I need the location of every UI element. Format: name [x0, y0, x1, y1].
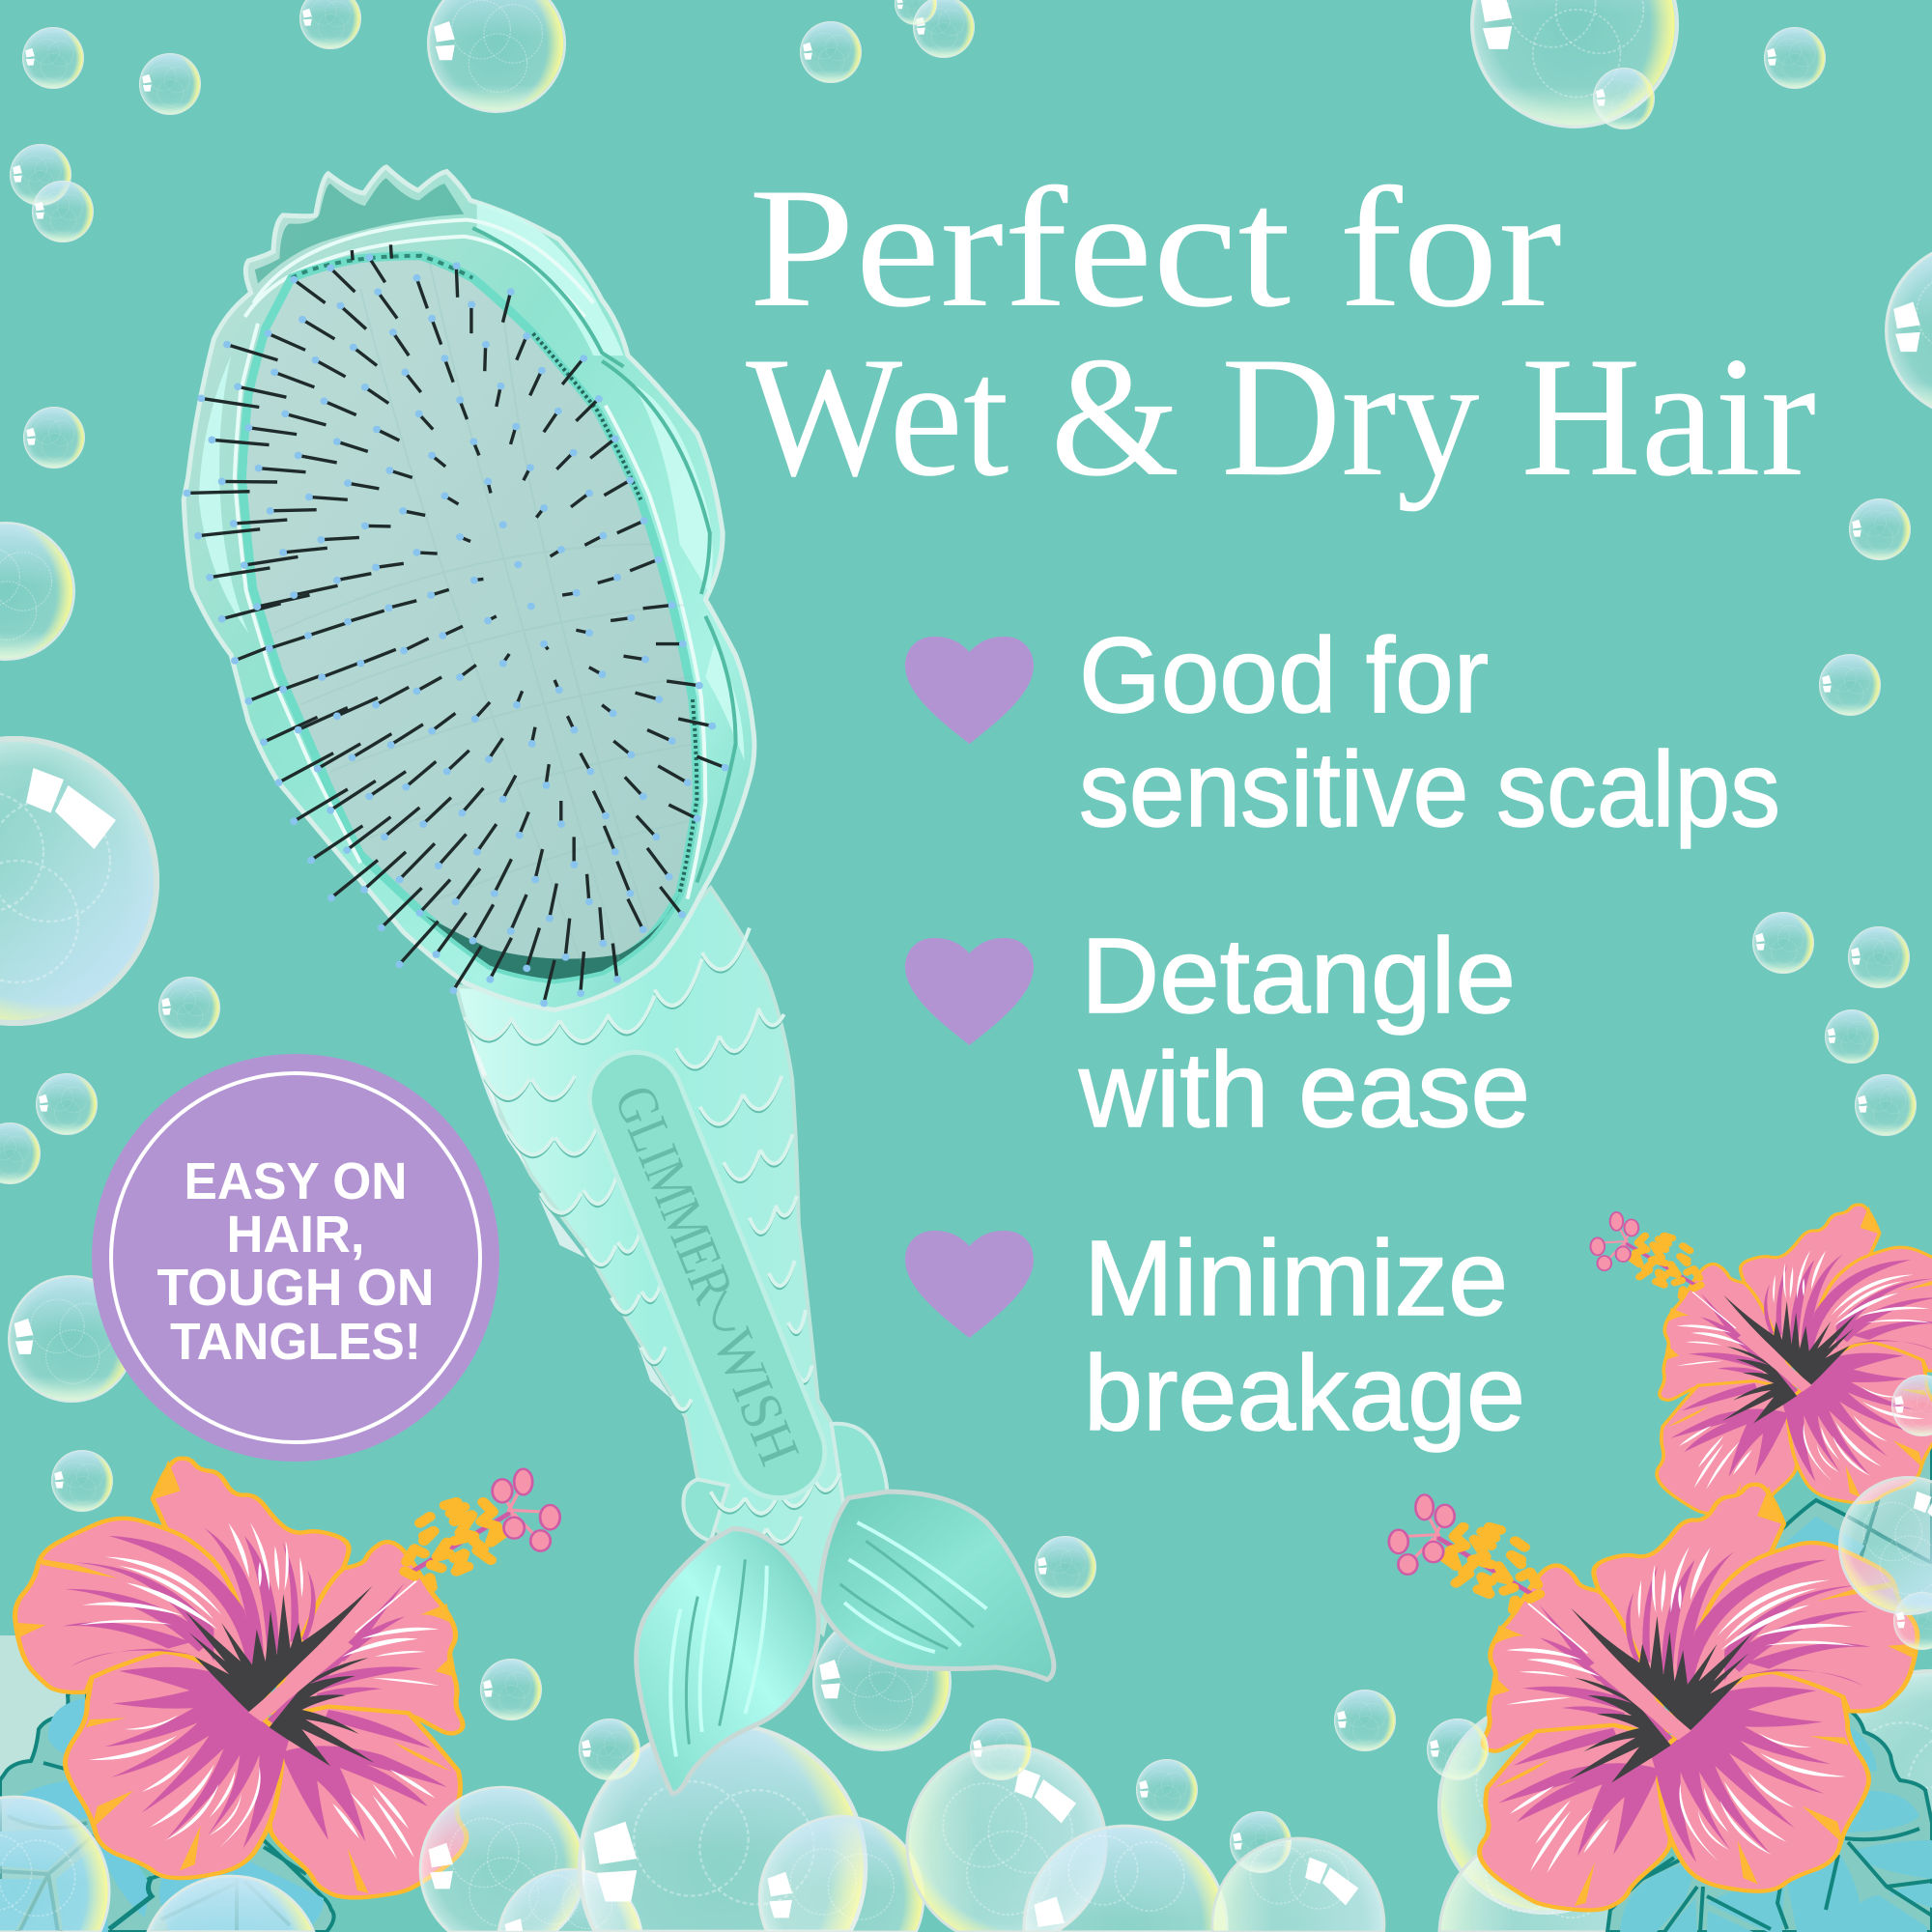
- hibiscus flower: right bottom: [1389, 1485, 1918, 1910]
- brush head: [184, 167, 754, 1009]
- benefit text: breakage: [1084, 1334, 1525, 1453]
- title: Wet & Dry Hair: [746, 321, 1816, 512]
- bristle pad: [242, 256, 696, 980]
- brand text: WISH: [700, 1321, 812, 1473]
- icon: heart: [905, 1231, 1034, 1338]
- badge: [92, 1054, 499, 1462]
- bristles: [186, 244, 725, 1004]
- pale panel behind left flower: [0, 1635, 92, 1800]
- title: Perfect for: [749, 152, 1562, 343]
- head frame with crown: [184, 167, 754, 1009]
- benefit: breakage: [905, 1219, 1525, 1453]
- brush: [184, 167, 1054, 1794]
- hibiscus flower: right top: [1590, 1205, 1932, 1517]
- benefit text: Detangle: [1081, 917, 1516, 1036]
- benefit text: Good for: [1079, 616, 1489, 735]
- bubble pile: bottom: [0, 1719, 1489, 1932]
- crown shading: [255, 178, 464, 284]
- leaves: right: [1607, 1449, 1932, 1932]
- leaves: left: [0, 1690, 334, 1932]
- brand plate: [576, 1038, 838, 1512]
- bubbles behind right flowers and leaves: [1437, 1671, 1932, 1932]
- tail fin: left lobe: [637, 1528, 818, 1794]
- badge text: EASY ON: [184, 1152, 408, 1210]
- icon: heart: [905, 637, 1034, 744]
- benefit text: with ease: [1078, 1031, 1530, 1150]
- icon: heart: [905, 938, 1034, 1045]
- badge text: HAIR,: [226, 1206, 365, 1264]
- tail fin: right lobe: [818, 1492, 1054, 1680]
- brand text: [602, 1077, 812, 1473]
- brand text: GLIMMER: [602, 1077, 747, 1311]
- badge text: TANGLES!: [170, 1313, 421, 1371]
- benefit: sensitive scalps: [905, 616, 1780, 849]
- benefit text: sensitive scalps: [1079, 730, 1780, 849]
- title: [746, 152, 1816, 512]
- benefit: detangle: [905, 917, 1530, 1150]
- hibiscus flower: left: [15, 1459, 560, 1897]
- benefit text: Minimize: [1084, 1219, 1508, 1338]
- badge text: TOUGH ON: [156, 1259, 435, 1317]
- brush handle: mermaid tail: [456, 888, 1054, 1794]
